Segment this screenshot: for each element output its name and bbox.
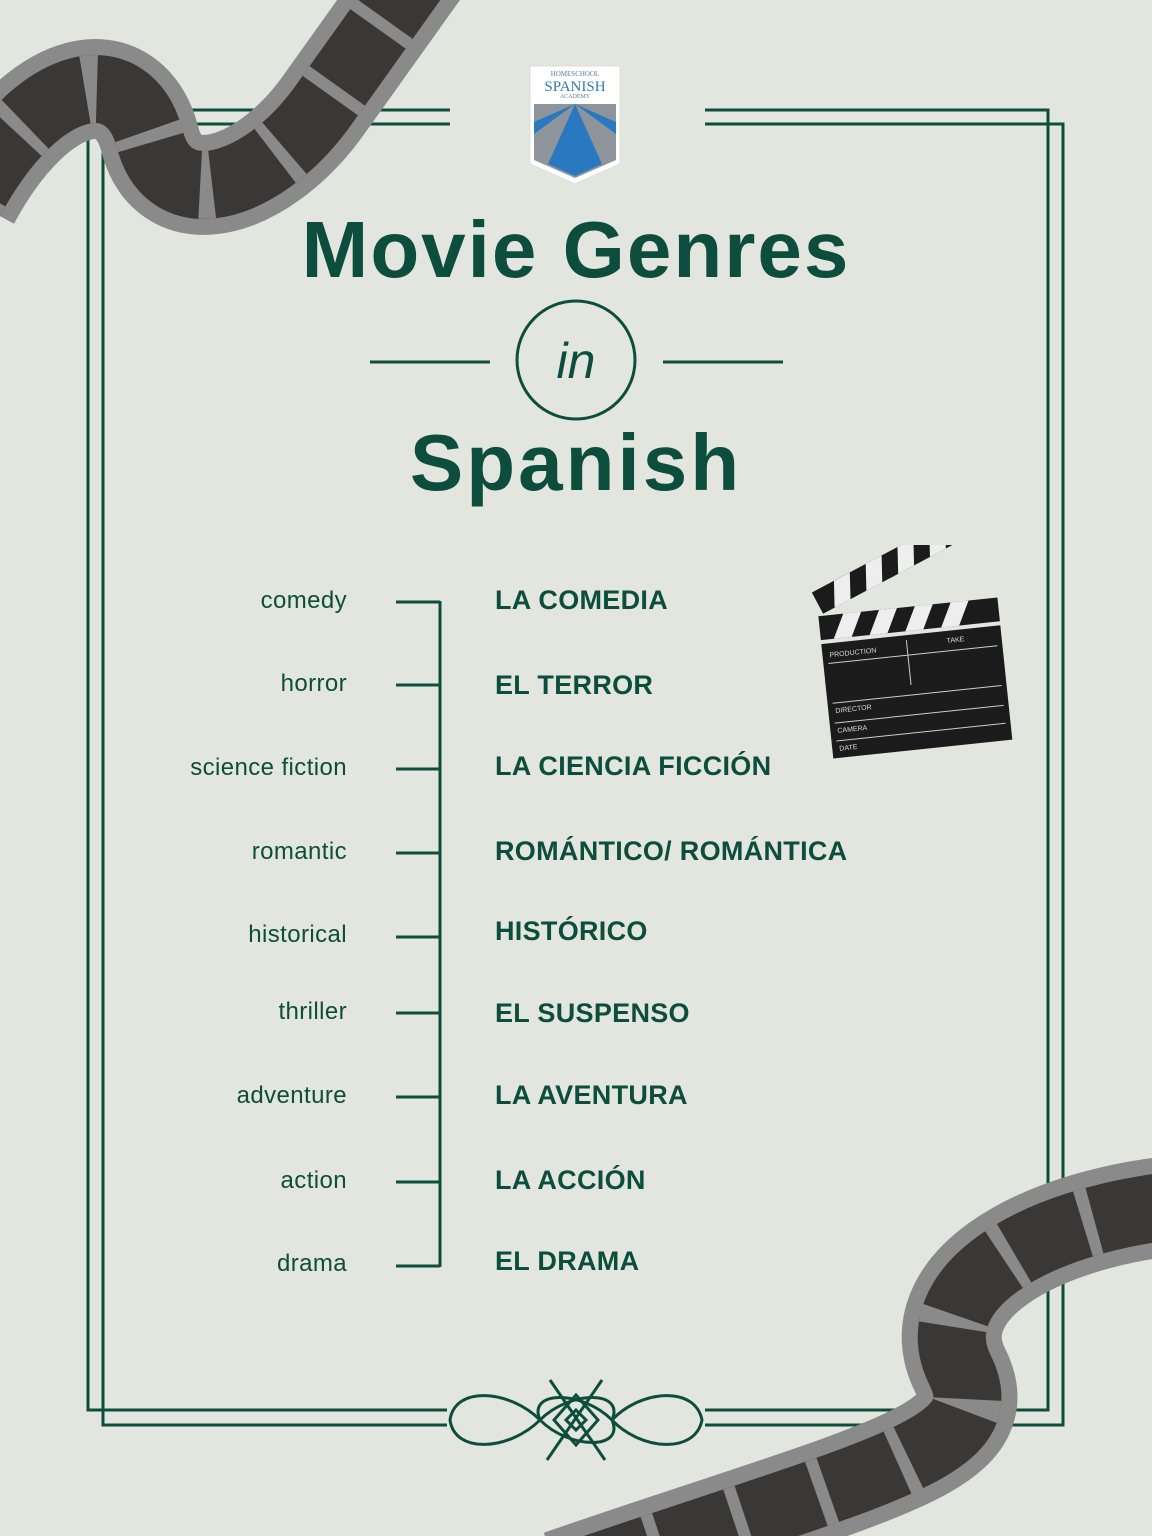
- vocabulary list: science fiction: [190, 754, 347, 781]
- vocabulary list: thriller: [278, 998, 347, 1025]
- logo: SPANISH: [544, 79, 606, 95]
- icon: clapperboard: TAKE: [946, 636, 965, 645]
- vocabulary list: action: [281, 1167, 347, 1194]
- icon: clapperboard: DIRECTOR: [835, 704, 872, 715]
- logo: [530, 66, 620, 184]
- vocabulary list: comedy: [261, 587, 347, 614]
- vocabulary list: romantic: [252, 838, 347, 865]
- subtitle: Spanish: [410, 418, 742, 507]
- icon: clapperboard: DATE: [839, 744, 858, 753]
- vocabulary list: EL DRAMA: [495, 1246, 639, 1276]
- in circle divider: in: [557, 333, 595, 389]
- vocabulary list: adventure: [237, 1082, 347, 1109]
- title: Movie Genres: [302, 205, 850, 294]
- vocabulary list: historical: [248, 921, 347, 948]
- vocabulary list: EL TERROR: [495, 670, 653, 700]
- vocabulary list: LA AVENTURA: [495, 1080, 688, 1110]
- in circle divider: [370, 300, 783, 420]
- ornament: bottom: [448, 1379, 704, 1461]
- vocabulary list: LA COMEDIA: [495, 585, 668, 615]
- vocabulary list: LA ACCIÓN: [495, 1165, 646, 1195]
- vocabulary list: EL SUSPENSO: [495, 998, 690, 1028]
- vocabulary list: horror: [281, 670, 347, 697]
- vocabulary list: drama: [277, 1250, 347, 1277]
- icon: clapperboard: PRODUCTION: [829, 647, 877, 659]
- vocabulary list: ROMÁNTICO/ ROMÁNTICA: [495, 836, 847, 866]
- film strip: top left: [0, 0, 460, 235]
- icon: clapperboard: CAMERA: [837, 725, 868, 735]
- icon: clapperboard: [812, 545, 1012, 758]
- vocabulary list: HISTÓRICO: [495, 916, 648, 946]
- logo: ACADEMY: [560, 94, 591, 100]
- vocabulary list: LA CIENCIA FICCIÓN: [495, 751, 771, 781]
- logo: HOMESCHOOL: [551, 70, 599, 78]
